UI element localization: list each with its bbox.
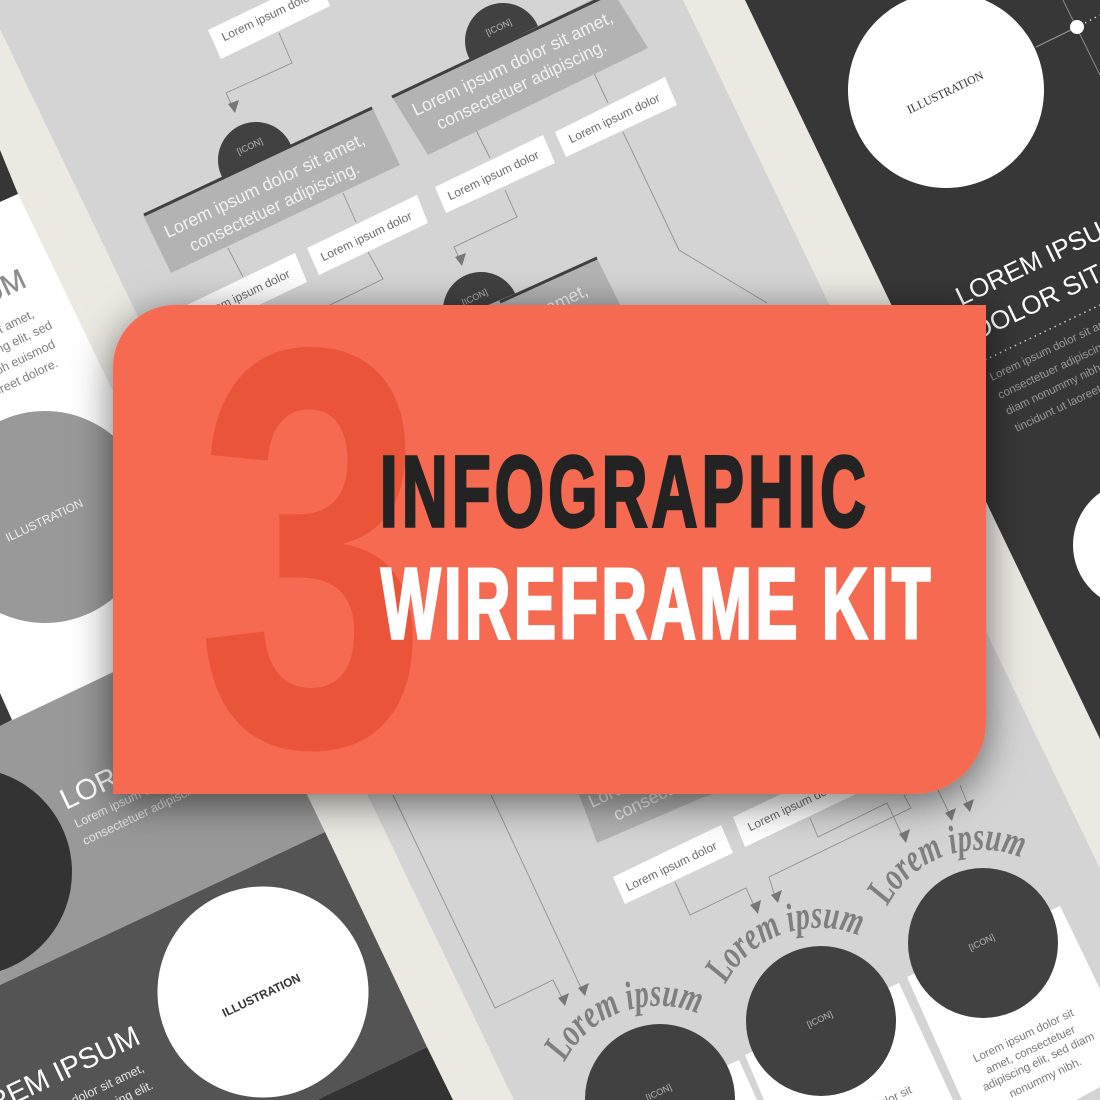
gray illustration circle: [0, 411, 151, 623]
box: lower left label: Lorem ipsum dolor: [623, 839, 719, 894]
box: lower left label: [613, 825, 733, 904]
title line 2: WIREFRAME KIT: [381, 547, 930, 660]
gray section heading and text: LOREM IPSUM: [55, 700, 252, 816]
flow node 2: [ICON]: [484, 17, 513, 38]
flow node 3: [ICON]: [460, 287, 489, 308]
curved heading: Lorem ipsum: [866, 826, 1025, 906]
second illustration circle: [1073, 481, 1100, 609]
flow node 4 header below card: consectetuer adipiscing.: [610, 723, 793, 825]
header bar: [143, 107, 400, 273]
icon circle: [443, 272, 519, 348]
title card: [113, 229, 986, 866]
icon circle: [218, 122, 294, 198]
white illustration circle: [158, 886, 368, 1098]
card text: nonummy nibh.: [1008, 1056, 1084, 1100]
flow node 1: Lorem ipsum dolor sit amet,: [161, 129, 368, 242]
card: [745, 983, 953, 1100]
column 2: [704, 904, 953, 1100]
flow node 3: Lorem ipsum dolor sit amet,: [384, 280, 591, 393]
connector to node: [1036, 0, 1100, 75]
box: node 2 left label: [435, 135, 555, 213]
column 3: [866, 826, 1100, 1100]
box: node 1 left label: Lorem ipsum dolor: [196, 267, 292, 322]
title line 1: INFOGRAPHIC: [380, 435, 866, 548]
column 2: [ICON]: [805, 1009, 834, 1030]
flow node 1: [ICON]: [235, 136, 264, 157]
gray section: [0, 620, 325, 985]
panel: right wireframe page: [745, 0, 1100, 739]
gray section heading and text: Lorem ipsum dolor sit amet,: [72, 752, 217, 831]
dark gray section: [0, 832, 427, 1100]
box: node 2 left label: Lorem ipsum dolor: [445, 148, 541, 203]
box: node 1 right label: [307, 195, 428, 275]
icon circle: [585, 1024, 735, 1100]
box: node 2 right label: Lorem ipsum dolor: [566, 91, 662, 146]
dark bottom section: [317, 1047, 453, 1100]
dark circle: [0, 768, 72, 976]
icon circle: [465, 3, 541, 79]
card text: [972, 1007, 1096, 1100]
flow node 3: [368, 258, 625, 425]
left white section paragraph: [0, 307, 60, 431]
flow node 1: [143, 107, 400, 273]
header bar: [392, 0, 648, 155]
panel: left wireframe page: [0, 150, 453, 1100]
card: [907, 906, 1100, 1100]
curved heading: Lorem ipsum: [544, 982, 702, 1062]
illustration circle: ILLUSTRATION: [905, 68, 986, 117]
card background: [113, 305, 986, 794]
flow node 4 header below card: Lorem ipsum dolor sit amet,: [585, 698, 794, 812]
flow node 2: Lorem ipsum dolor sit amet,: [409, 7, 616, 120]
card text: Lorem ipsum dolor sit: [972, 1007, 1077, 1065]
flow node 1: consectetuer adipiscing.: [186, 158, 363, 256]
box: node 2 right label: [555, 77, 677, 157]
box: lower right label: Lorem ipsum dolor: [745, 779, 841, 834]
flow node 2: consectetuer adipiscing.: [433, 36, 610, 134]
icon circle: [908, 868, 1058, 1018]
card text: amet, consectetuer: [984, 1024, 1078, 1077]
column 1: [544, 982, 757, 1100]
white illustration circle: ILLUSTRATION: [220, 971, 303, 1020]
connectors: [226, 33, 974, 1008]
box: lower right label: [733, 764, 856, 847]
box: top text label: [208, 0, 330, 59]
card text: adipiscing elit, sed diam: [981, 1031, 1096, 1094]
icon circle: [746, 946, 896, 1096]
curved heading: Lorem ipsum: [704, 904, 863, 984]
box: node 1 right label: Lorem ipsum dolor: [318, 209, 414, 264]
dotted divider: [985, 305, 1100, 360]
gray illustration circle: ILLUSTRATION: [3, 496, 85, 545]
illustration circle: [848, 0, 1044, 188]
paragraph: [988, 312, 1100, 435]
card: [653, 1060, 757, 1100]
flow node 2: [392, 0, 648, 155]
gray section heading and text: consectetuer adipiscing elit.: [80, 769, 225, 848]
box: node 1 left label: [185, 253, 307, 335]
column 3: [ICON]: [967, 932, 996, 953]
header bar: [368, 258, 625, 425]
big number 3: 3: [196, 229, 428, 866]
